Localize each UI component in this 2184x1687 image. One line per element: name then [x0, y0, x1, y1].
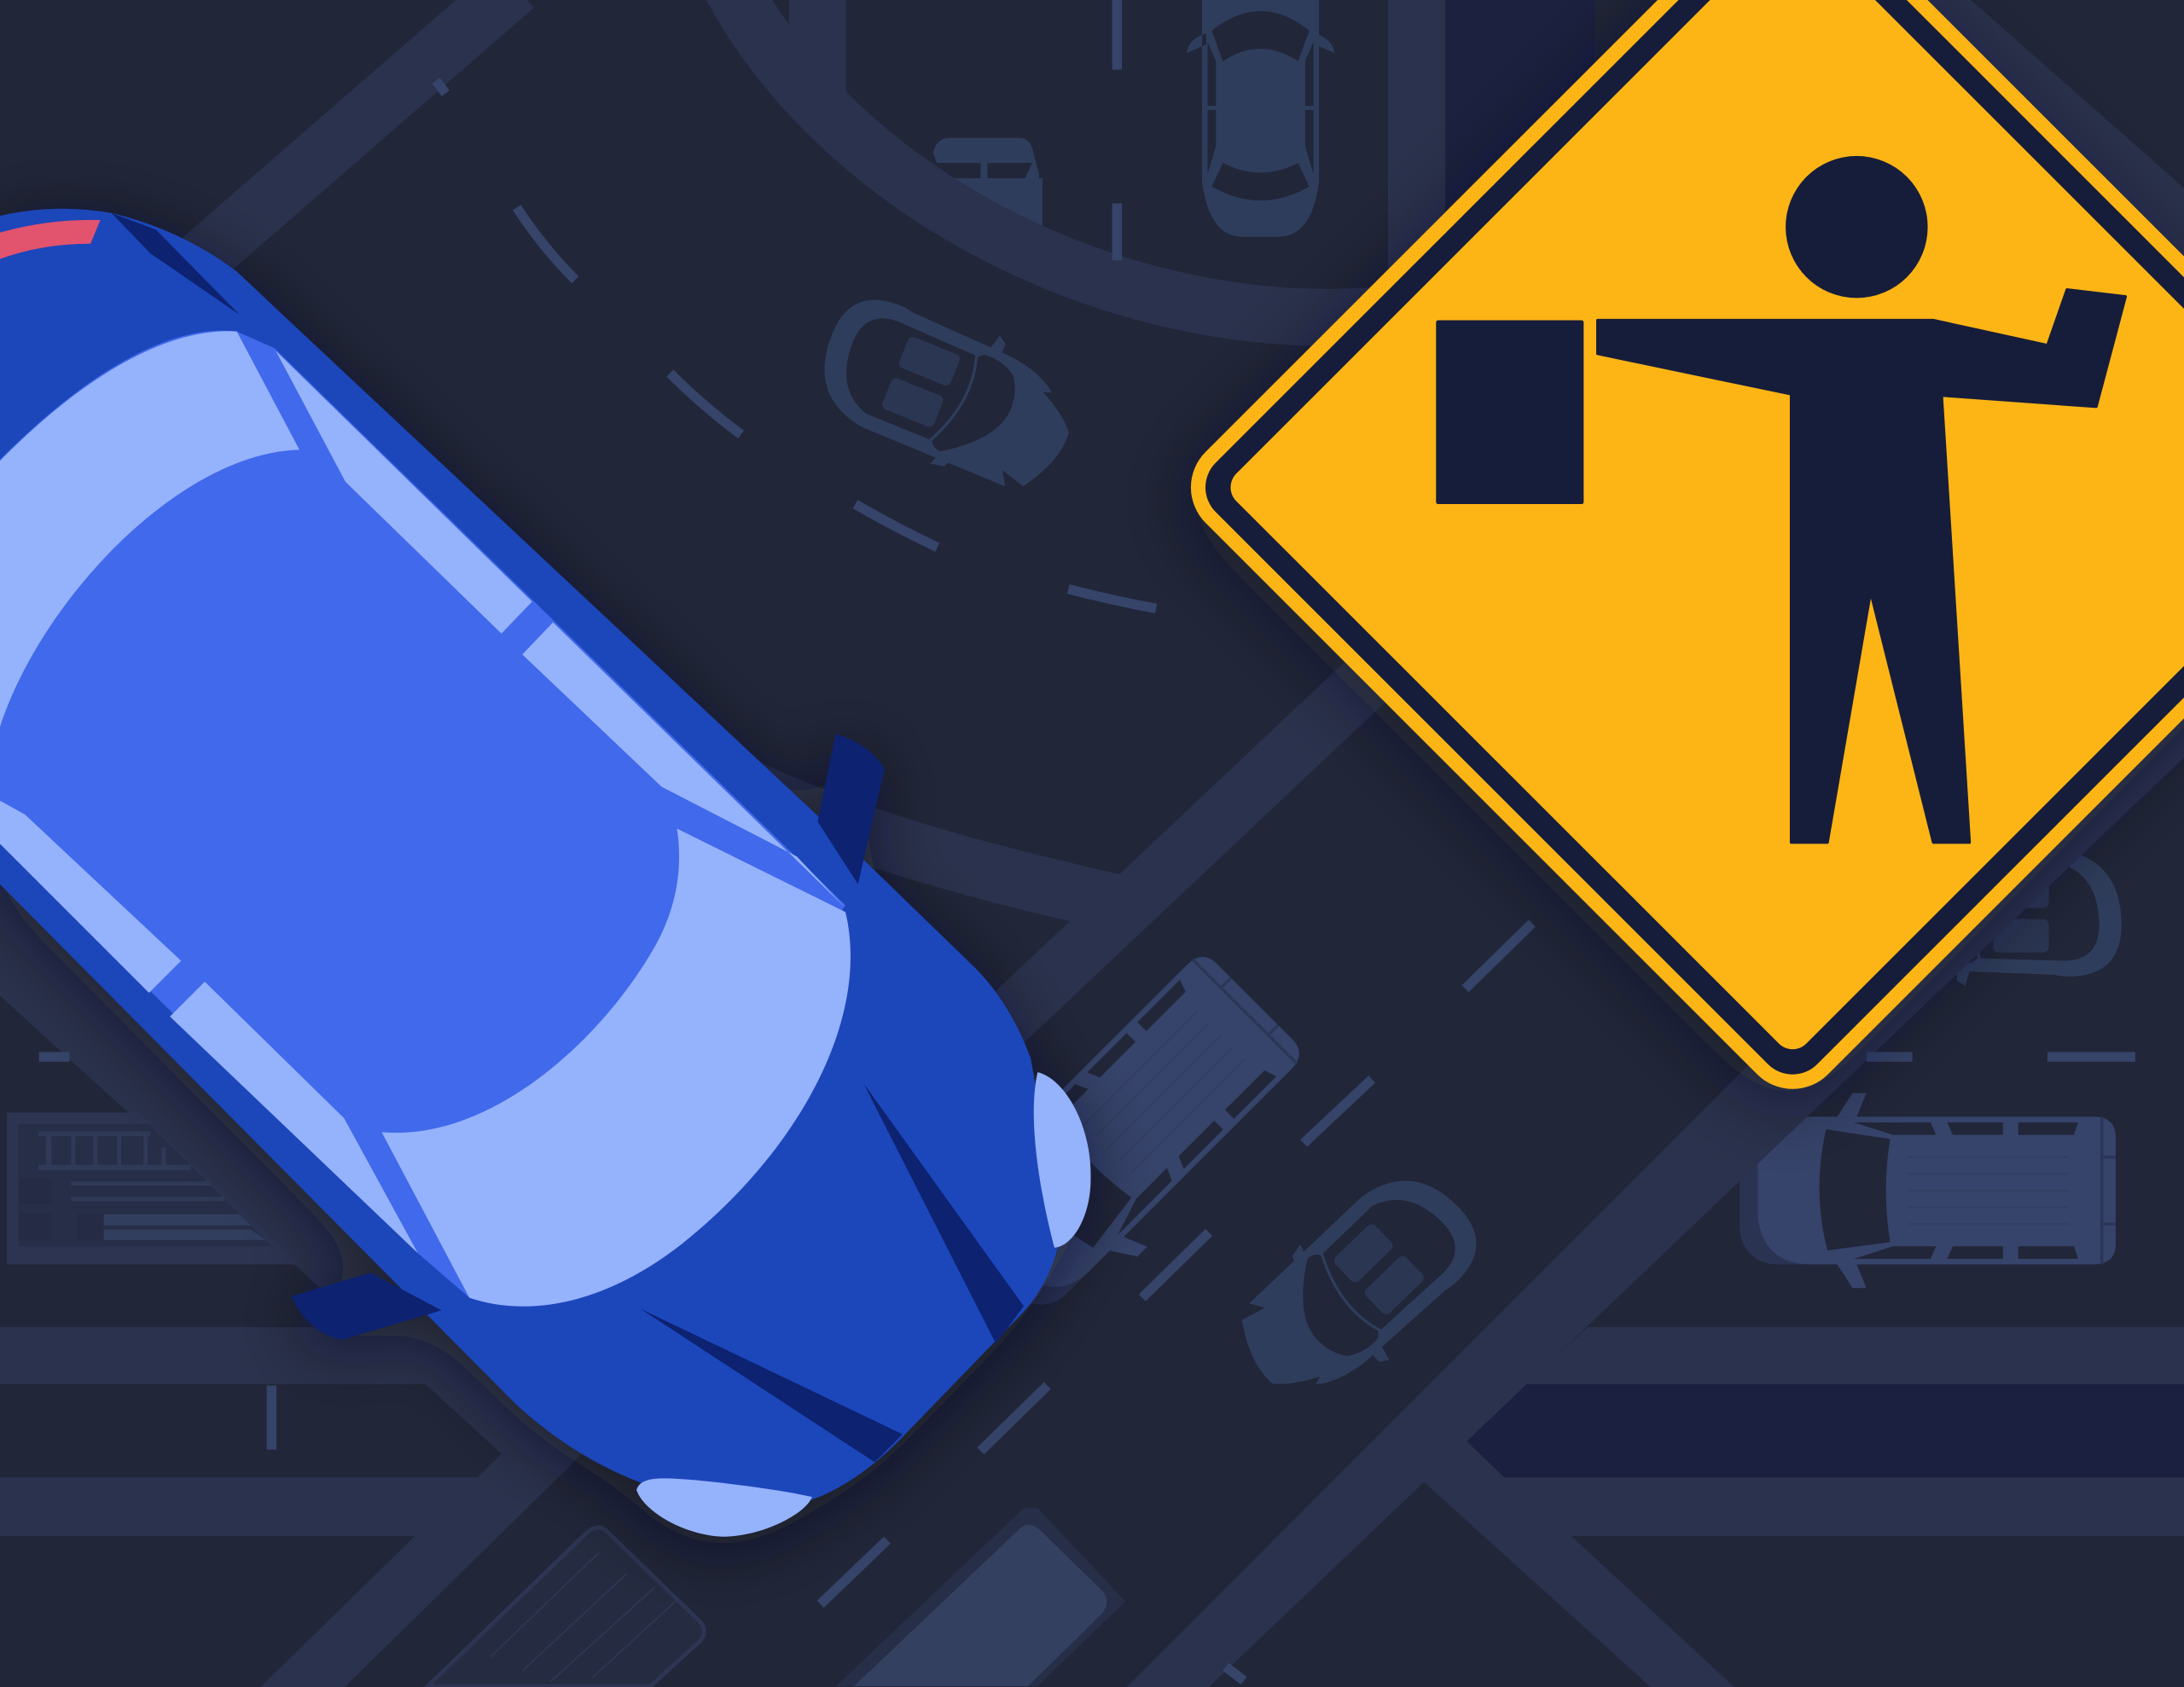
car body — [0, 209, 1061, 1510]
flagger warning sign — [1170, 0, 2184, 1110]
van bottom centre, solid — [836, 1508, 1125, 1686]
sedan top centre — [1187, 0, 1334, 237]
van right — [1740, 1093, 2116, 1288]
sign yellow face — [1223, 0, 2184, 1058]
road bands — [195, 0, 515, 264]
convertible lower — [1216, 1147, 1502, 1430]
sign dark border — [1191, 0, 2184, 1089]
ladder truck left — [7, 1113, 299, 1264]
headlight right — [1034, 1072, 1091, 1248]
convertible right, behind sign — [1865, 841, 2122, 986]
side window lower front — [170, 982, 418, 1253]
dark block top — [1446, 0, 1594, 209]
mirror right — [817, 733, 885, 884]
flag — [1436, 321, 1583, 504]
blue car — [0, 209, 1091, 1537]
flagger figure — [1598, 156, 2125, 843]
rear accent — [112, 213, 240, 315]
lane dashes — [517, 207, 575, 280]
sign outer yellow edge — [1170, 0, 2184, 1110]
pickup truck top — [933, 138, 1043, 229]
cabin roof — [0, 331, 845, 1298]
side window upper rear — [276, 351, 532, 634]
rear window — [0, 331, 299, 727]
hood crease bottom — [641, 1309, 903, 1462]
windshield — [381, 828, 851, 1307]
side window lower rear — [0, 801, 181, 993]
mirror left — [291, 1272, 442, 1340]
side window upper front — [522, 623, 845, 908]
van bottom left, outlined — [427, 1528, 704, 1686]
tail light — [0, 220, 101, 259]
hood crease right — [863, 1083, 1024, 1344]
convertible upper — [801, 277, 1093, 507]
van on road centre — [920, 932, 1323, 1336]
background traffic cars — [427, 0, 2122, 1686]
dark median right — [1467, 1384, 2184, 1477]
headlight bottom — [636, 1478, 812, 1537]
